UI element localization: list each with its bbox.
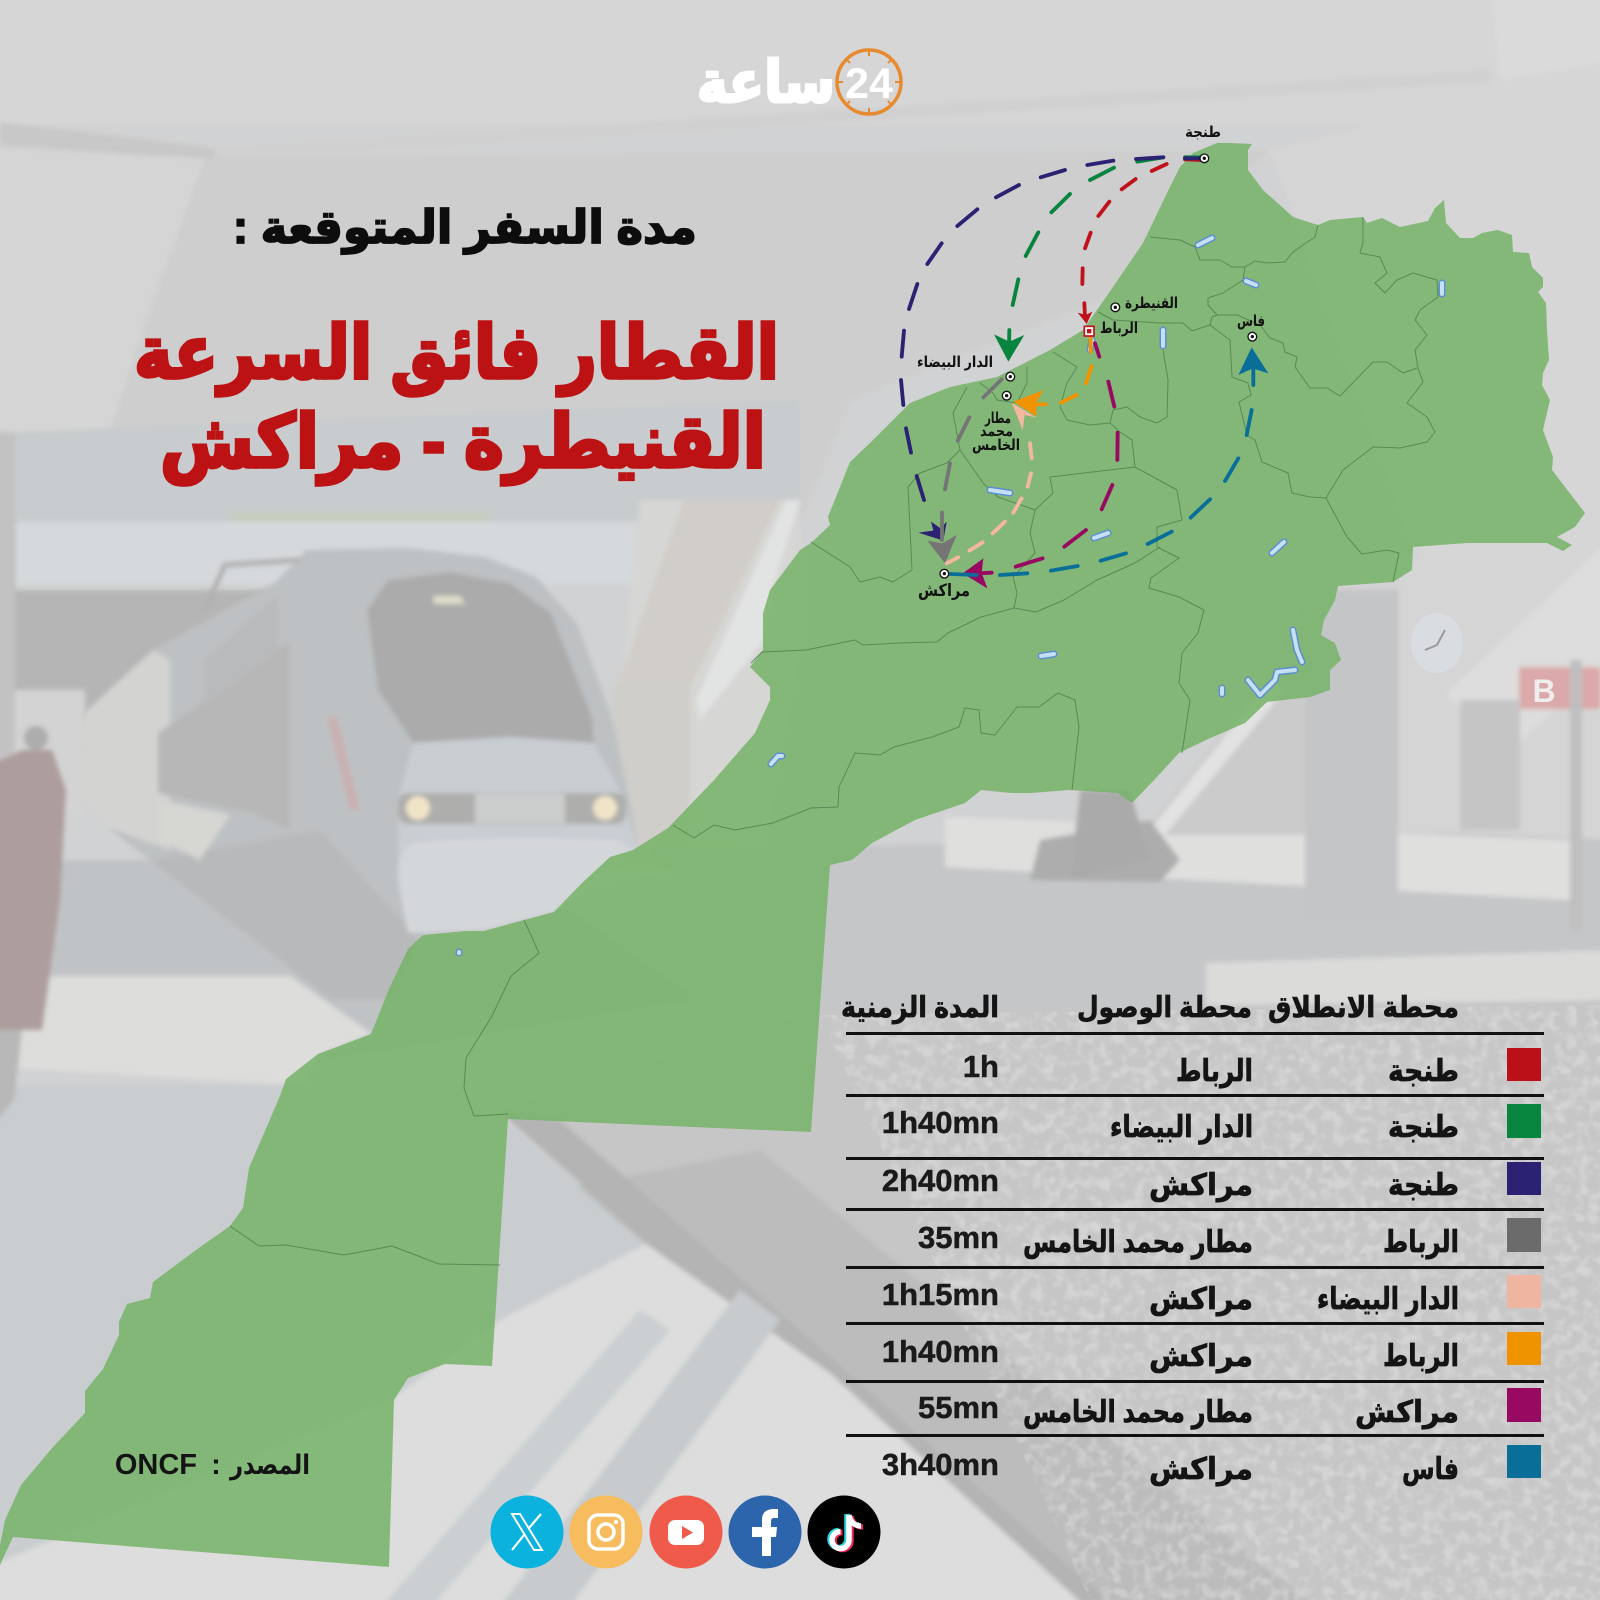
row: Casablanca to Marrakech: 1h15mn [882,1277,999,1312]
map city labels: القنيطرة [1125,295,1178,312]
person on platform [0,726,66,1140]
main title: القنيطرة - مراكش [160,400,766,485]
map city labels: طنجة [1185,124,1221,141]
route: Rabat to Marrakech (orange) [1013,338,1092,417]
row: Tangier to Casablanca [882,1104,1541,1144]
row: Marrakech to airport: مراكش [1355,1396,1459,1429]
row: Rabat to airport [918,1218,1541,1259]
row: Tangier to Marrakech: مراكش [1149,1169,1253,1202]
row: Marrakech to airport: مطار محمد الخامس [1023,1396,1253,1429]
table header [841,992,1459,1024]
row: Tangier to Casablanca: 1h40mn [882,1105,999,1140]
row: Tangier to Rabat: الرباط [1176,1055,1253,1088]
source note: المصدر [228,1450,310,1481]
main title [134,311,779,485]
row: Fes to Marrakech: مراكش [1149,1453,1253,1486]
row: Casablanca to Marrakech: مراكش [1149,1283,1253,1316]
icon: Facebook [728,1496,802,1568]
table header: محطة الوصول [1077,992,1252,1024]
map city labels: فاس [1237,313,1265,330]
source note: ONCF [115,1449,197,1481]
route: Fes to Marrakech (teal) [950,347,1268,575]
route: Casablanca to Marrakech (peach) [947,403,1037,563]
row: Rabat to airport: الرباط [1383,1226,1459,1259]
row: Casablanca to Marrakech: الدار البيضاء [1317,1283,1459,1316]
row: Rabat to airport: 35mn [918,1220,999,1255]
station clock and sign: B [1532,673,1556,709]
row: Fes to Marrakech: فاس [1402,1453,1459,1486]
city markers [940,154,1257,578]
icon: YouTube [650,1496,722,1568]
source note: : [211,1449,221,1481]
row: Rabat to Marrakech: 1h40mn [882,1334,999,1369]
logo: 24 ساعة: 24 [845,60,893,108]
row: Rabat to Marrakech: الرباط [1383,1340,1459,1373]
map city labels: الخامس [972,437,1020,454]
row: Tangier to Rabat: 1h [963,1049,999,1084]
icon: X [490,1496,564,1568]
route: Tangier to Marrakech (navy) [901,157,1200,541]
source note [115,1449,310,1481]
row: Tangier to Marrakech: 2h40mn [882,1163,999,1198]
table header: المدة الزمنية [841,992,999,1024]
map city labels: الدار البيضاء [917,354,993,371]
route: Tangier to Rabat (red) [1078,159,1200,324]
map city labels: مراكش [918,581,970,601]
row: Marrakech to airport: 55mn [918,1390,999,1425]
map city labels: الرباط [1100,320,1138,337]
row: Rabat to Marrakech: مراكش [1149,1340,1253,1373]
logo: 24 ساعة: ساعة [697,50,835,115]
subtitle: مدة السفر المتوقعة : [233,201,697,254]
icon: Instagram [570,1496,642,1568]
timetable [841,992,1544,1486]
row: Marrakech to airport [918,1388,1541,1429]
row: Tangier to Marrakech [882,1162,1541,1202]
map city labels: محمد [980,423,1013,440]
route: Marrakech to airport (magenta) [963,343,1118,588]
row: Tangier to Casablanca: الدار البيضاء [1110,1111,1253,1144]
route: Tangier to Casablanca (green) [994,157,1200,362]
row: Fes to Marrakech [882,1445,1541,1486]
map city labels: مطار [984,410,1011,427]
row: Fes to Marrakech: 3h40mn [882,1447,999,1482]
row: Rabat to Marrakech [882,1332,1541,1373]
icon: TikTok [808,1496,880,1568]
ballast texture [820,1005,1600,1600]
train [82,548,638,1000]
region borders [230,217,1438,1265]
lakes [459,238,1442,953]
row: Tangier to Rabat: طنجة [1388,1055,1459,1088]
station clock and sign [1411,613,1556,709]
route: Rabat to airport to Marrakech (grey) [927,379,1002,563]
row: Casablanca to Marrakech [882,1275,1541,1316]
main title: القطار فائق السرعة [134,311,779,396]
train routes with arrows [901,154,1268,588]
row: Tangier to Rabat [963,1048,1541,1088]
row: Rabat to airport: مطار محمد الخامس [1023,1226,1253,1259]
social media icons [490,1496,880,1568]
table header: محطة الانطلاق [1268,992,1459,1024]
row: Tangier to Marrakech: طنجة [1388,1169,1459,1202]
map city labels [917,124,1265,601]
row: Tangier to Casablanca: طنجة [1388,1111,1459,1144]
